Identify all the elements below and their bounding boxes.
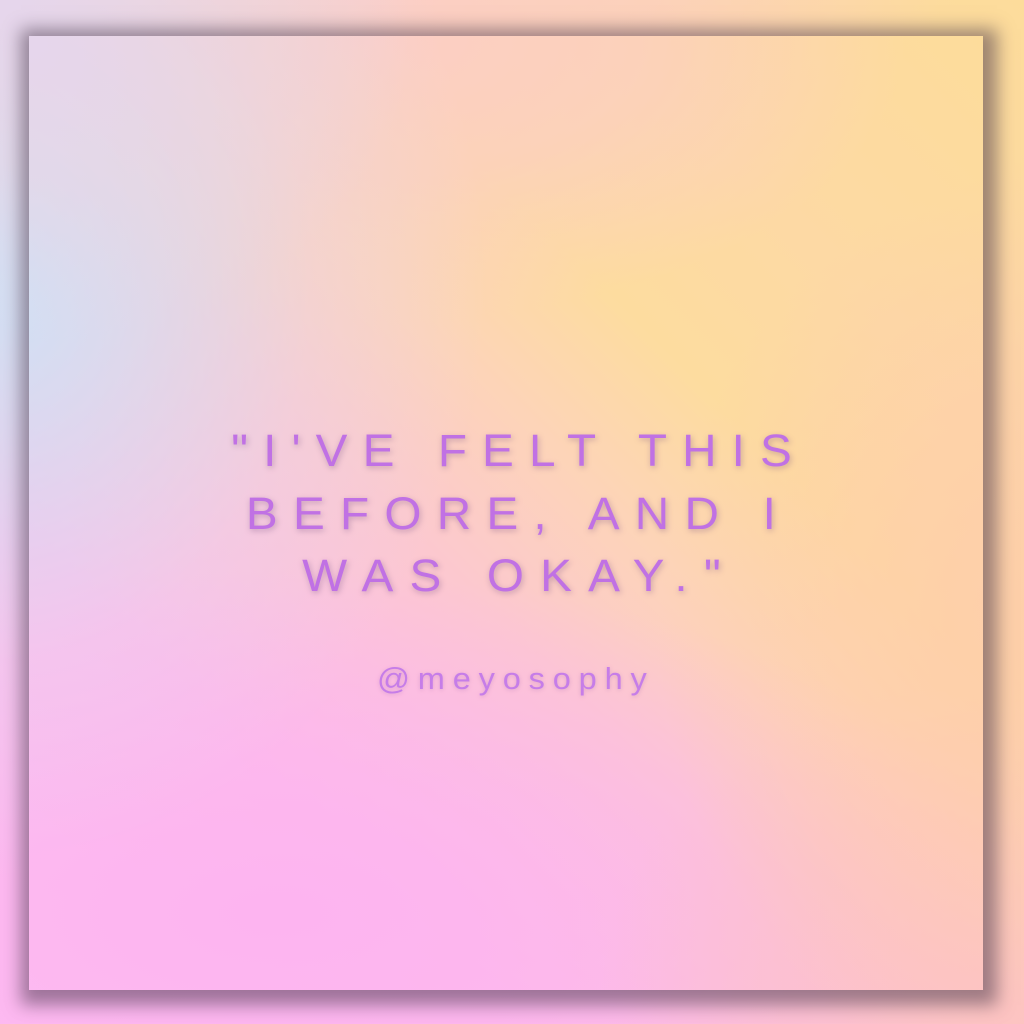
handle: @meyosophy: @meyosophy bbox=[377, 661, 647, 696]
quote text: WAS OKAY." bbox=[302, 550, 721, 601]
quote text: BEFORE, AND I bbox=[246, 488, 776, 539]
quote text bbox=[231, 425, 792, 601]
quote text: "I'VE FELT THIS bbox=[231, 425, 792, 476]
